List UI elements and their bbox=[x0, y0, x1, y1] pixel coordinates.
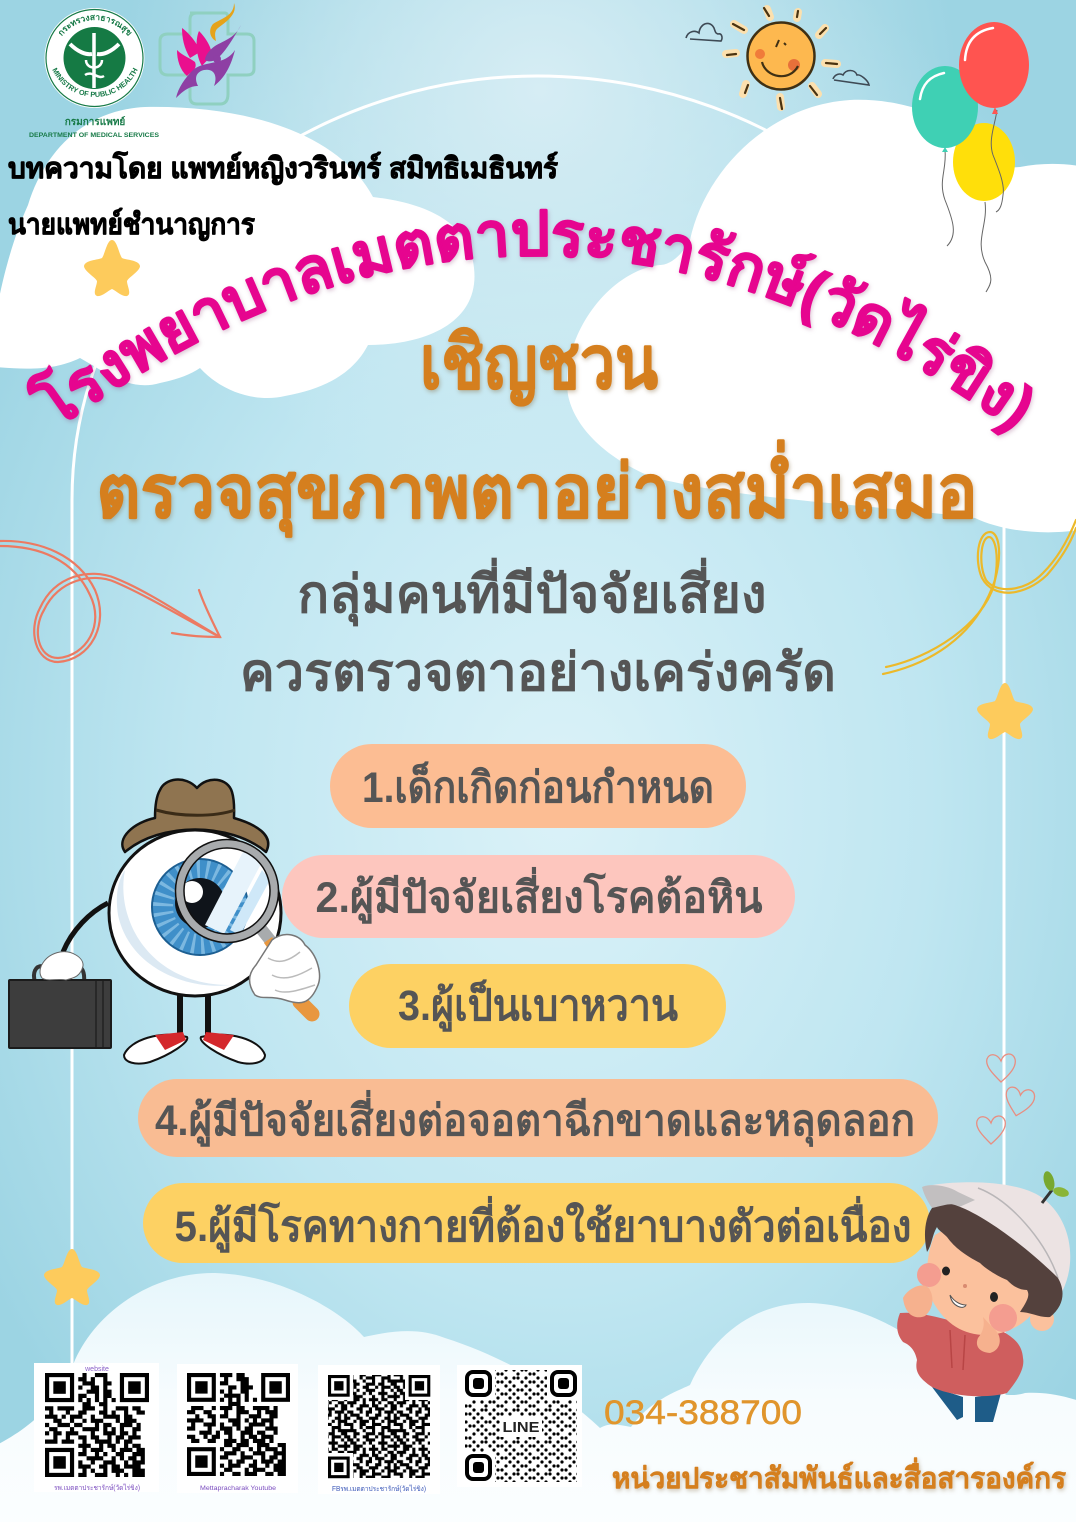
QR code: facebook bbox=[318, 1365, 440, 1494]
boy cap bbox=[922, 1182, 1070, 1292]
pill 2: 2.ผู้มีปัจจัยเสี่ยงโรคต้อหิน bbox=[316, 867, 763, 924]
pill 2 bbox=[282, 855, 795, 938]
pill 3 bbox=[349, 964, 726, 1048]
boy face bbox=[927, 1220, 1039, 1335]
mascot legs and shoes bbox=[124, 995, 265, 1064]
logo: ministry of public health: MINISTRY OF PUBLIC HEALTH bbox=[52, 68, 138, 97]
boy hands bbox=[903, 1285, 1000, 1353]
risk group heading bbox=[240, 558, 836, 702]
department credit: หน่วยประชาสัมพันธ์และสื่อสารองค์กร bbox=[612, 1457, 1066, 1495]
QR code: website bbox=[34, 1363, 159, 1492]
logo: department label: DEPARTMENT OF MEDICAL SERVICES bbox=[29, 132, 160, 139]
byline: บทความโดย แพทย์หญิงวรินทร์ สมิทธิเมธินทร์ bbox=[8, 150, 558, 186]
arrow: coral scribble bbox=[0, 541, 220, 662]
QR code: line: LINE bbox=[502, 1419, 540, 1436]
mascot iris bbox=[152, 859, 248, 955]
cloud: top right bbox=[567, 100, 1076, 532]
boy hair bbox=[925, 1204, 1063, 1317]
scribble: yellow ribbon bbox=[883, 520, 1076, 674]
boy hoodie bbox=[897, 1313, 1023, 1396]
phone number: 034-388700 bbox=[604, 1394, 802, 1432]
QR code: website: รพ.เมตตาประชารักษ์(วัดไร่ขิง) bbox=[54, 1483, 140, 1492]
logo: hospital lotus bbox=[160, 3, 254, 104]
icon: star right bbox=[977, 683, 1033, 739]
QR code: facebook: FBรพ.เมตตาประชารักษ์(วัดไร่ขิง) bbox=[332, 1484, 426, 1493]
byline bbox=[8, 150, 558, 242]
cloud: top left bbox=[0, 107, 474, 398]
hospital name on arc: โรงพยาบาลเมตตาประชารักษ์(วัดไร่ขิง) bbox=[26, 208, 1036, 439]
pill 3: 3.ผู้เป็นเบาหวาน bbox=[398, 979, 679, 1032]
boy legs bbox=[932, 1387, 1001, 1422]
logo: department label: กรมการแพทย์ bbox=[65, 116, 125, 128]
pill 4 bbox=[138, 1079, 938, 1157]
boy sprout bbox=[1042, 1190, 1052, 1203]
cloud: bottom left bbox=[0, 1273, 1076, 1522]
character: boy with cap bbox=[897, 1170, 1070, 1422]
balloons bbox=[912, 22, 1029, 292]
mascot: eyeball detective bbox=[9, 780, 319, 1064]
icon: small clouds bbox=[686, 23, 869, 85]
pill 1 bbox=[330, 744, 746, 828]
main heading: ตรวจสุขภาพตาอย่างสม่ำเสมอ bbox=[96, 439, 978, 538]
byline: นายแพทย์ชำนาญการ bbox=[8, 207, 255, 242]
QR code: line bbox=[457, 1365, 582, 1487]
invitation heading: เชิญชวน bbox=[420, 321, 658, 406]
sun bbox=[726, 8, 837, 109]
icon: star top left bbox=[84, 240, 140, 296]
icon: star lower left bbox=[44, 1249, 100, 1305]
logo: department label bbox=[29, 116, 160, 139]
logo: ministry of public health: กระทรวงสาธารณสุข bbox=[59, 14, 132, 36]
risk group heading: กลุ่มคนที่มีปัจจัยเสี่ยง bbox=[298, 558, 766, 627]
pill 5 bbox=[143, 1183, 930, 1263]
QR code: website: website bbox=[84, 1366, 109, 1373]
mascot hat bbox=[122, 780, 268, 852]
mascot eyeball bbox=[109, 830, 281, 996]
boy features bbox=[917, 1263, 941, 1287]
logo: ministry of public health bbox=[44, 8, 144, 108]
mascot arm and case bbox=[9, 903, 111, 1048]
QR code: youtube: Mettapracharak Youtube bbox=[200, 1485, 276, 1492]
white arch frame line bbox=[72, 76, 1004, 1400]
pill 1: 1.เด็กเกิดก่อนกำหนด bbox=[362, 761, 714, 812]
pill 5: 5.ผู้มีโรคทางกายที่ต้องใช้ยาบางตัวต่อเนื่อง bbox=[174, 1196, 912, 1253]
pill 4: 4.ผู้มีปัจจัยเสี่ยงต่อจอตาฉีกขาดและหลุดลอก bbox=[155, 1090, 915, 1148]
mascot magnifier bbox=[176, 840, 319, 1014]
risk group heading: ควรตรวจตาอย่างเคร่งครัด bbox=[240, 644, 836, 702]
QR code: youtube bbox=[177, 1364, 298, 1493]
hearts bbox=[977, 1054, 1036, 1144]
